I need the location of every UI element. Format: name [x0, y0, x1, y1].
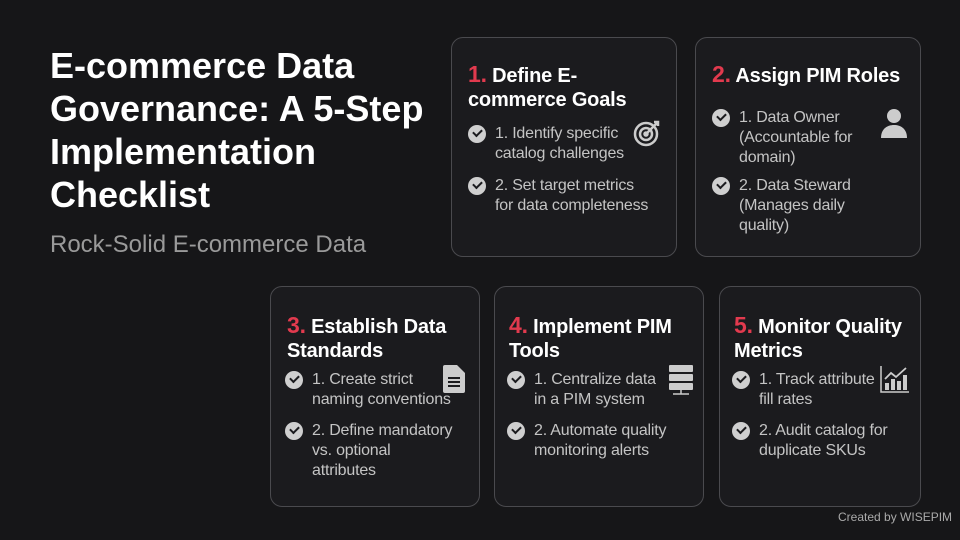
- title: E-commerce Data Governance: A 5-Step Implementation Checklist: [50, 45, 423, 215]
- item 2.2: [712, 177, 851, 234]
- heading 1: 1. Define E-: [468, 61, 577, 87]
- item 2.1: (Accountable for: [739, 129, 852, 146]
- heading 3: 3. Establish Data: [287, 312, 446, 338]
- item 2.1: domain): [739, 149, 795, 166]
- heading 5: Metrics: [734, 340, 803, 362]
- item 1.1: 1. Identify specific: [495, 125, 618, 142]
- panel: step 5: [719, 286, 921, 507]
- item 4.2: 2. Automate quality: [534, 422, 666, 439]
- panel: step 4: [494, 286, 704, 507]
- item 3.1: [285, 371, 451, 408]
- subtitle: Rock-Solid E-commerce Data: [50, 231, 366, 258]
- item 2.2: (Manages daily: [739, 197, 845, 214]
- heading 1: [468, 61, 626, 111]
- item 4.1: in a PIM system: [534, 391, 645, 408]
- item 3.2: [285, 422, 452, 479]
- heading 3: [287, 312, 446, 362]
- item 2.2: 2. Data Steward: [739, 177, 851, 194]
- item 5.1: [732, 371, 875, 408]
- item 2.1: 1. Data Owner: [739, 109, 840, 126]
- item 5.1: 1. Track attribute: [759, 371, 875, 388]
- item 3.2: 2. Define mandatory: [312, 422, 452, 439]
- heading 4: 4. Implement PIM: [509, 312, 672, 338]
- item 5.2: duplicate SKUs: [759, 442, 866, 459]
- item 1.2: 2. Set target metrics: [495, 177, 634, 194]
- item 3.1: naming conventions: [312, 391, 451, 408]
- heading 5: [734, 312, 902, 362]
- heading 4: Tools: [509, 340, 560, 362]
- item 4.1: 1. Centralize data: [534, 371, 656, 388]
- item 3.2: vs. optional: [312, 442, 391, 459]
- icon: target: [634, 120, 660, 146]
- footer credit: Created by WISEPIM: [838, 510, 952, 524]
- heading 5: 5. Monitor Quality: [734, 312, 902, 338]
- heading 3: Standards: [287, 340, 383, 362]
- item 2.2: quality): [739, 217, 789, 234]
- icon: chart: [880, 366, 909, 393]
- item 5.2: 2. Audit catalog for: [759, 422, 888, 439]
- heading 2: 2. Assign PIM Roles: [712, 61, 900, 87]
- icon: server: [669, 365, 693, 395]
- item 4.2: [507, 422, 666, 459]
- panel: step 2: [695, 37, 921, 257]
- item 4.1: [507, 371, 656, 408]
- item 1.1: catalog challenges: [495, 145, 624, 162]
- item 3.1: 1. Create strict: [312, 371, 413, 388]
- heading 1: commerce Goals: [468, 89, 626, 111]
- item 1.1: [468, 125, 624, 162]
- panel: step 1: [451, 37, 677, 257]
- item 4.2: monitoring alerts: [534, 442, 649, 459]
- icon: document: [443, 365, 465, 393]
- item 1.2: for data completeness: [495, 197, 648, 214]
- item 1.2: [468, 177, 648, 214]
- panel: step 3: [270, 286, 480, 507]
- heading 4: [509, 312, 672, 362]
- item 5.2: [732, 422, 888, 459]
- item 3.2: attributes: [312, 462, 376, 479]
- item 2.1: [712, 109, 852, 166]
- item 5.1: fill rates: [759, 391, 812, 408]
- icon: person: [881, 109, 907, 138]
